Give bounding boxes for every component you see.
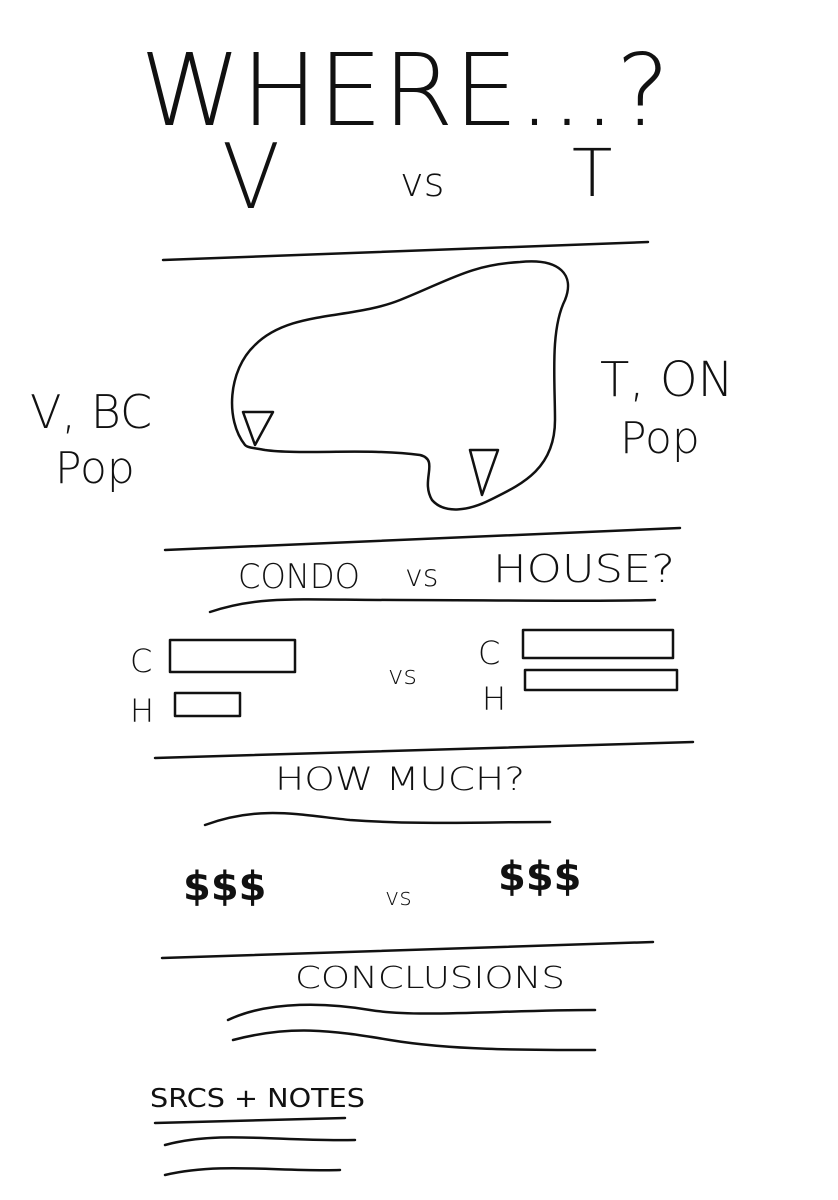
marker: Toronto (470, 450, 498, 495)
subtitle: V vs T: V (222, 125, 280, 230)
bar chart: Vancouver: H (130, 692, 154, 730)
heading: condo vs house: vs (405, 559, 438, 594)
conclusions text lines (228, 1005, 595, 1050)
bar chart: Toronto: H (482, 680, 506, 718)
sources & notes: SRCS + NOTES (150, 1084, 365, 1114)
bar chart: Vancouver: C (130, 642, 152, 680)
label: V, BC Pop: V, BC (30, 385, 152, 439)
heading: condo vs house: HOUSE? (493, 547, 675, 591)
heading: conclusions: CONCLUSIONS (295, 961, 565, 996)
subtitle: V vs T (222, 125, 612, 230)
label: T, ON Pop: Pop (620, 413, 700, 464)
heading: condo vs house (238, 547, 675, 597)
vs: vs (388, 661, 417, 691)
marker: Vancouver (243, 412, 273, 445)
label: V, BC Pop (30, 385, 152, 494)
heading: condo vs house: CONDO (238, 557, 360, 597)
bar chart: Toronto (478, 630, 677, 718)
title: WHERE...? (140, 32, 670, 149)
prices: $$$ (183, 864, 266, 910)
subtitle: V vs T: T (572, 135, 612, 212)
bar chart: Vancouver (130, 640, 295, 730)
label: T, ON Pop: T, ON (600, 352, 734, 408)
subtitle: V vs T: vs (400, 160, 445, 206)
heading: how much: HOW MUCH? (275, 760, 525, 798)
label: T, ON Pop (600, 352, 734, 464)
prices: vs (385, 883, 412, 911)
label: V, BC Pop: Pop (55, 443, 135, 494)
map of Canada outline (232, 261, 568, 509)
prices: $$$ (498, 854, 582, 900)
bar chart: Toronto: C (478, 634, 500, 672)
sources & notes (150, 1084, 365, 1175)
prices (183, 854, 582, 911)
